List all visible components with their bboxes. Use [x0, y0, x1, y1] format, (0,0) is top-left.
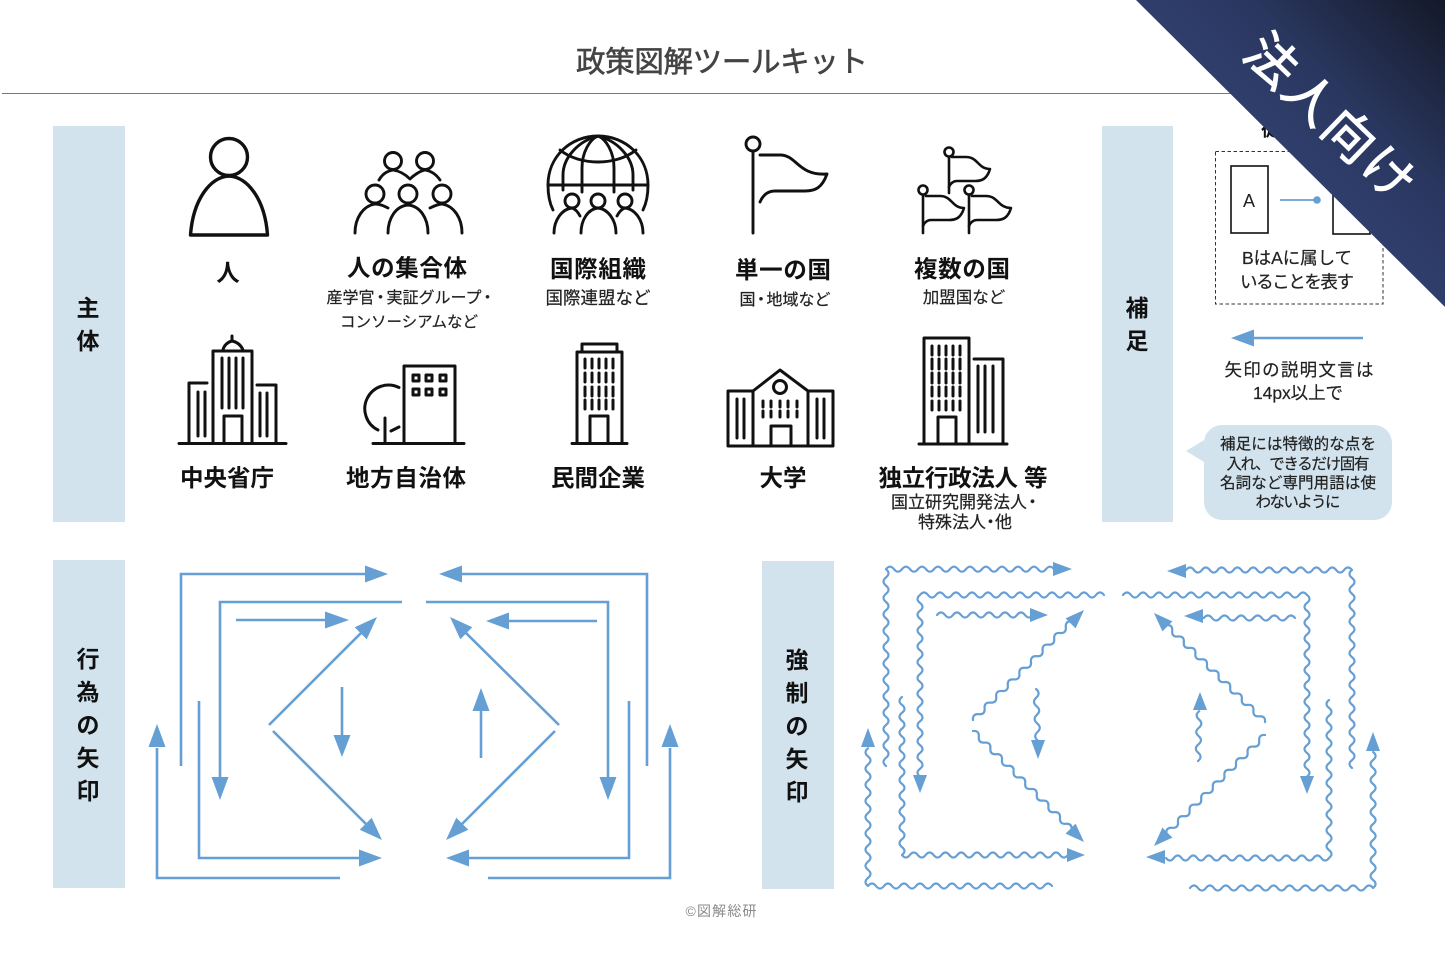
label: 複数の国 — [914, 256, 1010, 307]
label: 国際組織 — [546, 256, 650, 308]
arrow: diagonal up — [269, 617, 377, 725]
label: 独立行政法人 等: 独立行政法人 等 — [878, 465, 1048, 491]
arrow: inner up — [472, 688, 490, 758]
label: 複数の国: 複数の国 — [914, 256, 1010, 282]
legend: 従属関係 box: A — [1243, 191, 1255, 211]
arrow: wavy inner left — [1184, 609, 1295, 623]
arrow: inner right — [236, 612, 349, 628]
arrow: lower left — [446, 701, 629, 866]
label: 人の集合体: 産学官・実証グループ・ — [326, 289, 496, 307]
panel: 行為の矢印 label: 矢 — [76, 745, 100, 771]
arrow: second top down — [426, 602, 616, 800]
panel: 補足 label — [1102, 126, 1173, 522]
icon: 大学 — [728, 370, 833, 446]
icon: 国際組織 — [548, 136, 648, 233]
legend: 従属関係 box: B — [1345, 191, 1357, 211]
arrow: inner down — [334, 687, 350, 757]
label: 単一の国: 単一の国 — [735, 257, 831, 283]
arrow: wavy second top down — [1123, 592, 1314, 794]
legend: arrow caption: 矢印の説明文言は — [1224, 360, 1374, 380]
legend: 従属関係 box: いることを表す — [1240, 272, 1354, 292]
label: 人: 人 — [216, 260, 240, 286]
legend: 従属関係 box — [1216, 120, 1383, 304]
arrow: wavy diagonal down — [973, 731, 1084, 842]
corner banner — [1136, 0, 1445, 307]
panel: 補足 label: 足 — [1126, 328, 1148, 354]
icon: 民間企業 — [572, 344, 627, 444]
arrow: diagonal down — [446, 731, 555, 840]
panel: 行為の矢印 label: 印 — [76, 778, 100, 804]
arrow: wavy diagonal up — [1154, 613, 1265, 722]
arrow: second top down — [212, 602, 402, 800]
panel: 補足 label: 補 — [1126, 295, 1148, 321]
arrow: wavy inner right — [937, 608, 1048, 622]
label: 独立行政法人 等: 特殊法人・他 — [918, 513, 1012, 532]
callout: 補足 note — [1186, 425, 1392, 520]
arrow: outer top — [439, 566, 647, 766]
panel: 主体 label: 体 — [76, 328, 100, 354]
panel: 行為の矢印 label: 為 — [76, 679, 100, 705]
panel: 強制の矢印 label: の — [786, 713, 808, 739]
arrow: wavy second top down — [913, 592, 1104, 793]
arrow: inner left — [486, 612, 597, 630]
arrows: 強制の矢印 right — [1123, 564, 1380, 890]
corner banner: 法人向け — [1233, 23, 1428, 214]
arrow: diagonal up — [450, 617, 559, 725]
arrow: outer top — [181, 566, 388, 766]
title: 政策図解ツールキット — [576, 46, 868, 79]
arrow: wavy outer top — [1167, 564, 1354, 768]
icon: 複数の国 — [918, 148, 1011, 233]
label: 国際組織: 国際連盟など — [546, 288, 650, 308]
icon: 人の集合体 — [355, 152, 462, 233]
label: 独立行政法人 等 — [878, 465, 1048, 532]
panel: 主体 label — [53, 126, 125, 522]
panel: 強制の矢印 label: 制 — [786, 680, 808, 706]
panel: 強制の矢印 label — [762, 561, 834, 889]
label: 地方自治体: 地方自治体 — [346, 465, 466, 491]
arrow: outer up — [488, 724, 678, 878]
label: 国際組織: 国際組織 — [550, 256, 646, 282]
arrow: diagonal down — [273, 731, 382, 840]
arrow: wavy outer top — [884, 562, 1072, 766]
arrows: 行為の矢印 right — [426, 566, 678, 878]
label: 中央省庁: 中央省庁 — [180, 465, 274, 491]
legend: arrow caption — [1224, 330, 1374, 403]
arrows: 行為の矢印 left — [148, 566, 402, 878]
arrow: wavy inner up — [1193, 692, 1207, 761]
arrow: wavy outer up — [1190, 732, 1380, 890]
arrow: wavy lower left — [1146, 700, 1332, 864]
label: 複数の国: 加盟国など — [923, 288, 1006, 307]
panel: 行為の矢印 label: 行 — [76, 646, 100, 672]
label: 単一の国: 国・地域など — [739, 291, 831, 309]
panel: 強制の矢印 label: 強 — [786, 647, 808, 673]
label: 独立行政法人 等: 国立研究開発法人・ — [891, 493, 1041, 512]
legend: 従属関係 box: BはAに属して — [1242, 248, 1352, 268]
label: 大学: 大学 — [760, 465, 806, 491]
label: 単一の国 — [735, 257, 831, 309]
label: 民間企業: 民間企業 — [551, 465, 645, 491]
label: 人の集合体: 人の集合体 — [347, 255, 468, 281]
icon: 独立行政法人 等 — [919, 338, 1007, 444]
arrow: wavy diagonal down — [1154, 735, 1265, 846]
callout: 補足 note: 名詞など専門用語は使 — [1220, 474, 1376, 492]
arrow: lower right — [199, 701, 382, 866]
icon: 地方自治体 — [365, 366, 464, 444]
icon: 単一の国 — [746, 137, 827, 233]
arrow: wavy inner down — [1031, 689, 1045, 759]
callout: 補足 note: 補足には特徴的な点を — [1220, 435, 1376, 453]
panel: 行為の矢印 label: の — [76, 712, 100, 738]
copyright: ©図解総研 — [686, 903, 756, 919]
label: 人の集合体 — [326, 255, 496, 331]
arrow: wavy diagonal up — [973, 610, 1084, 720]
callout: 補足 note: 入れ、できるだけ固有 — [1226, 455, 1370, 473]
callout: 補足 note: わないように — [1256, 493, 1340, 511]
label: 人の集合体: コンソーシアムなど — [340, 313, 479, 331]
icon: 中央省庁 — [179, 336, 286, 444]
panel: 強制の矢印 label: 印 — [786, 779, 808, 805]
panel: 強制の矢印 label: 矢 — [786, 746, 808, 772]
icon: 人 — [190, 138, 268, 235]
arrows: 強制の矢印 left — [861, 562, 1104, 888]
arrow: outer up — [148, 724, 340, 878]
legend: 従属関係 box: 従属関係 — [1261, 120, 1333, 140]
legend: arrow caption: 14px以上で — [1253, 383, 1343, 403]
panel: 主体 label: 主 — [76, 295, 100, 321]
panel: 行為の矢印 label — [53, 560, 125, 888]
arrow: wavy lower right — [900, 697, 1085, 862]
arrow: wavy outer up — [861, 728, 1052, 888]
